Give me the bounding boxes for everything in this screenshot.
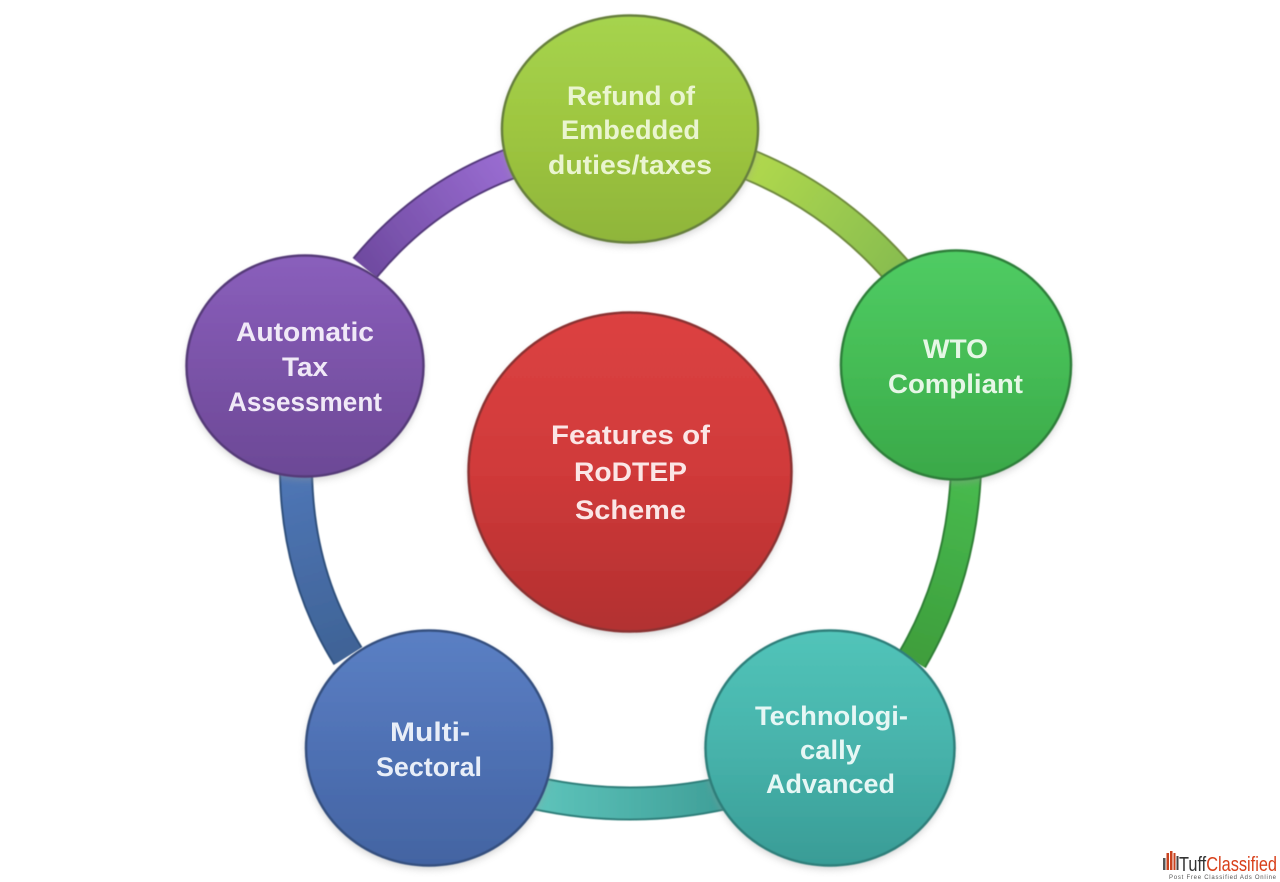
arc: top to right connector (750, 165, 898, 272)
node: Multi-Sectoral (306, 630, 552, 869)
arc: bottom-left to left connector (296, 470, 348, 656)
node: Technologically Advanced: Advanced (766, 769, 895, 799)
node: Refund of Embedded duties/taxes: duties/taxes (548, 150, 712, 180)
node: WTO Compliant (841, 250, 1071, 483)
node: WTO Compliant: Compliant (888, 369, 1023, 399)
node: Automatic Tax Assessment: Assessment (228, 387, 382, 417)
node: Technologically Advanced (706, 630, 954, 869)
watermark: TuffClassified logo (1163, 851, 1277, 881)
node: Multi-Sectoral: Multi- (390, 717, 470, 747)
logo tagline: Post Free Classified Ads Online (1169, 875, 1277, 881)
node: Refund of Embedded duties/taxes: Refund of (567, 81, 696, 111)
center circle: Features of RoDTEP Scheme: Features of (551, 420, 711, 450)
arc: bottom-right to bottom-left connector (535, 793, 725, 804)
center circle: Features of RoDTEP Scheme: RoDTEP (574, 457, 687, 487)
node: Automatic Tax Assessment: Tax (282, 352, 328, 382)
node: Technologically Advanced: Technologi- (755, 701, 908, 731)
node: Refund of Embedded duties/taxes (502, 16, 758, 246)
node: Refund of Embedded duties/taxes: Embedded (561, 115, 700, 145)
node: Automatic Tax Assessment: Automatic (236, 317, 374, 347)
node: Technologically Advanced: cally (800, 735, 861, 765)
icon: logo bars (1163, 851, 1178, 870)
node: Multi-Sectoral: Sectoral (376, 752, 482, 782)
node: WTO Compliant: WTO (923, 334, 988, 364)
center circle: Features of RoDTEP Scheme: Scheme (575, 495, 686, 525)
center circle: Features of RoDTEP Scheme (468, 312, 792, 635)
node: Automatic Tax Assessment (186, 256, 424, 480)
arc: right to bottom-right connector (912, 470, 966, 660)
arc: left to top connector (365, 163, 512, 268)
